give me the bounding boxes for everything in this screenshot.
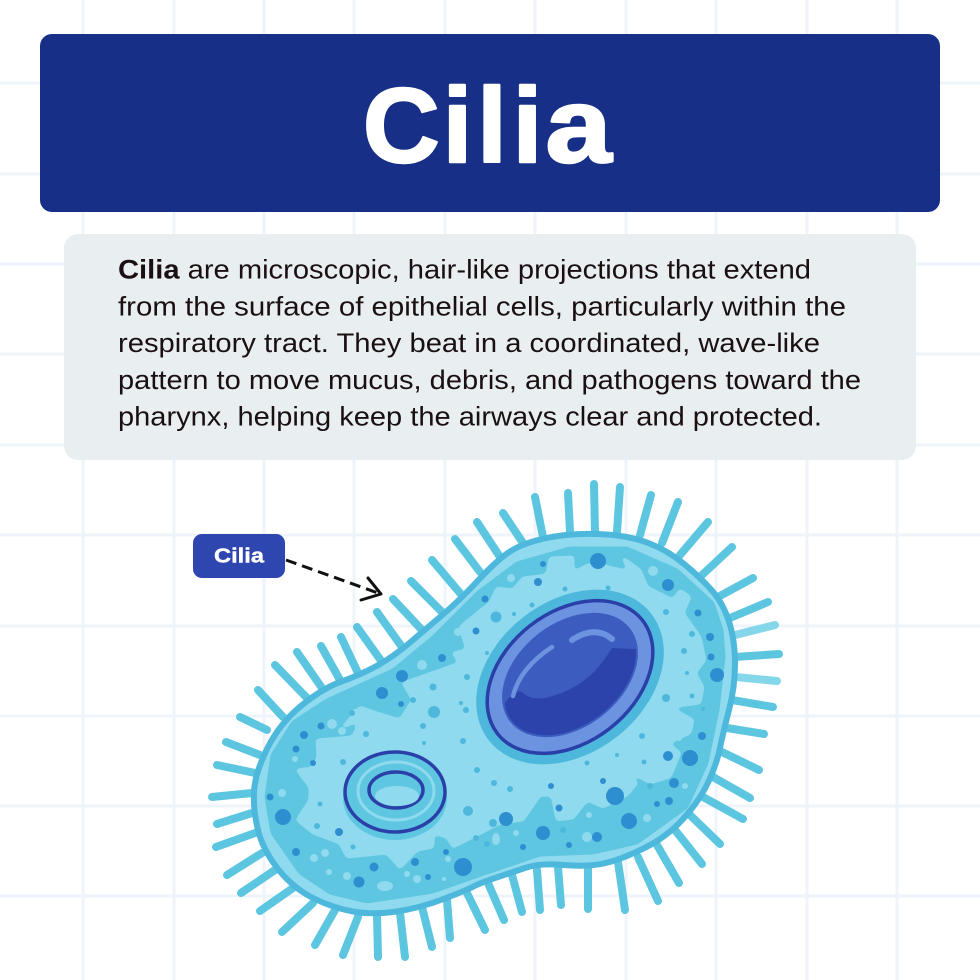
definition text: respiratory tract. They beat in a coordinated, wave-like	[118, 328, 820, 358]
definition text: pharynx, helping keep the airways clear and protected.	[118, 402, 822, 432]
title banner	[40, 34, 940, 212]
cilia	[212, 484, 779, 957]
title: Cili	[363, 67, 542, 185]
arrow: label to cilia	[286, 560, 381, 600]
cytoplasm central zone	[297, 557, 705, 868]
cilia label	[193, 534, 285, 578]
ring organelle	[343, 752, 447, 840]
panel: definition	[64, 234, 916, 460]
cell membrane	[254, 534, 735, 913]
cell illustration	[212, 484, 779, 957]
cytoplasm outer zone	[266, 548, 724, 902]
nucleus	[476, 590, 664, 764]
cytoplasm granules	[266, 553, 724, 891]
definition text: Cilia are microscopic, hair-like projections that extend	[118, 255, 811, 285]
title: a	[546, 67, 613, 185]
definition text: from the surface of epithelial cells, particularly within the	[118, 291, 846, 321]
definition text	[118, 255, 861, 432]
definition text: pattern to move mucus, debris, and pathogens toward the	[118, 365, 861, 395]
cilia label: Cilia	[214, 546, 265, 568]
